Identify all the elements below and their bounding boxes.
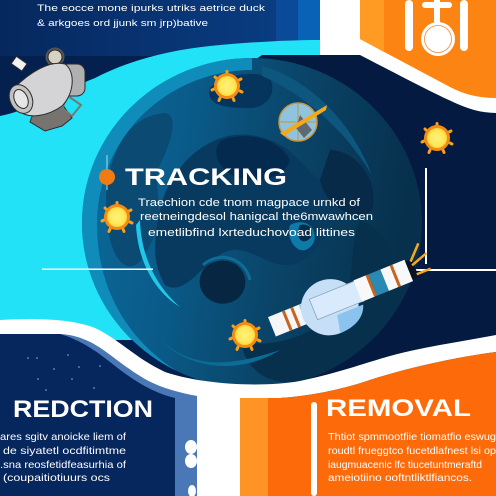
icon: sun right	[422, 124, 452, 152]
icon: small probe	[279, 103, 327, 141]
top intro text	[37, 3, 265, 29]
removal text: ameiotiino ooftntliktlfiancos.	[328, 472, 472, 484]
top blue header	[0, 0, 320, 56]
icon: sun bottom	[230, 320, 260, 350]
icon: large satellite	[263, 240, 442, 356]
cyan wave	[0, 40, 320, 340]
icon: grey satellite	[5, 49, 85, 131]
callout lines	[42, 168, 496, 271]
reduction text: ares sgitv anoicke liem of	[0, 431, 126, 443]
stars	[27, 354, 101, 391]
heading: reduction: REDCTION	[13, 396, 153, 423]
reduction text: de siyatetl ocdfitimtme	[3, 445, 126, 457]
planet	[80, 58, 422, 388]
bottom left navy panel	[0, 330, 197, 496]
heading: tracking: TRACKING	[125, 164, 287, 191]
reduction text	[0, 431, 126, 484]
planet rim	[80, 58, 252, 388]
orange top panel with white band	[320, 0, 496, 113]
tracking text: emetlibfind lxrteduchovoad littines	[148, 227, 356, 239]
bottom white band	[0, 319, 496, 496]
tracking text: Traechion cde tnom magpace urnkd of	[138, 197, 361, 209]
icon: sun left	[102, 202, 132, 232]
top intro text: & arkgoes ord jjunk sm jrp)bative	[37, 18, 208, 29]
cyan crescent	[136, 220, 180, 307]
removal text: iaugmuacenic lfc tiucetuntmeraftd	[328, 459, 482, 471]
planet craters	[106, 66, 398, 383]
reduction text: .sna reosfetidfeasurhia of	[0, 459, 126, 471]
icon: orbital instrument	[405, 0, 468, 56]
top intro text: The eocce mone ipurks utriks aetrice duck	[37, 3, 265, 14]
reduction text: (coupaitiotiuurs ocs	[3, 472, 110, 484]
removal orange panel	[240, 352, 496, 496]
icon: sun top	[212, 72, 242, 100]
icon: orange marker	[99, 155, 115, 190]
tracking text	[138, 197, 373, 239]
right dark navy space	[230, 54, 496, 400]
tracking text: reetneingdesol hanigcal the6mwawhcen	[140, 211, 373, 223]
removal text: roudtl frueggtco fucetdlafnest lsi op	[328, 445, 496, 457]
heading: removal: REMOVAL	[326, 395, 471, 422]
removal text	[328, 431, 496, 484]
white blobs	[185, 440, 197, 496]
removal text: Thtiot spmmootfiie tiomatfio eswug	[328, 431, 496, 443]
